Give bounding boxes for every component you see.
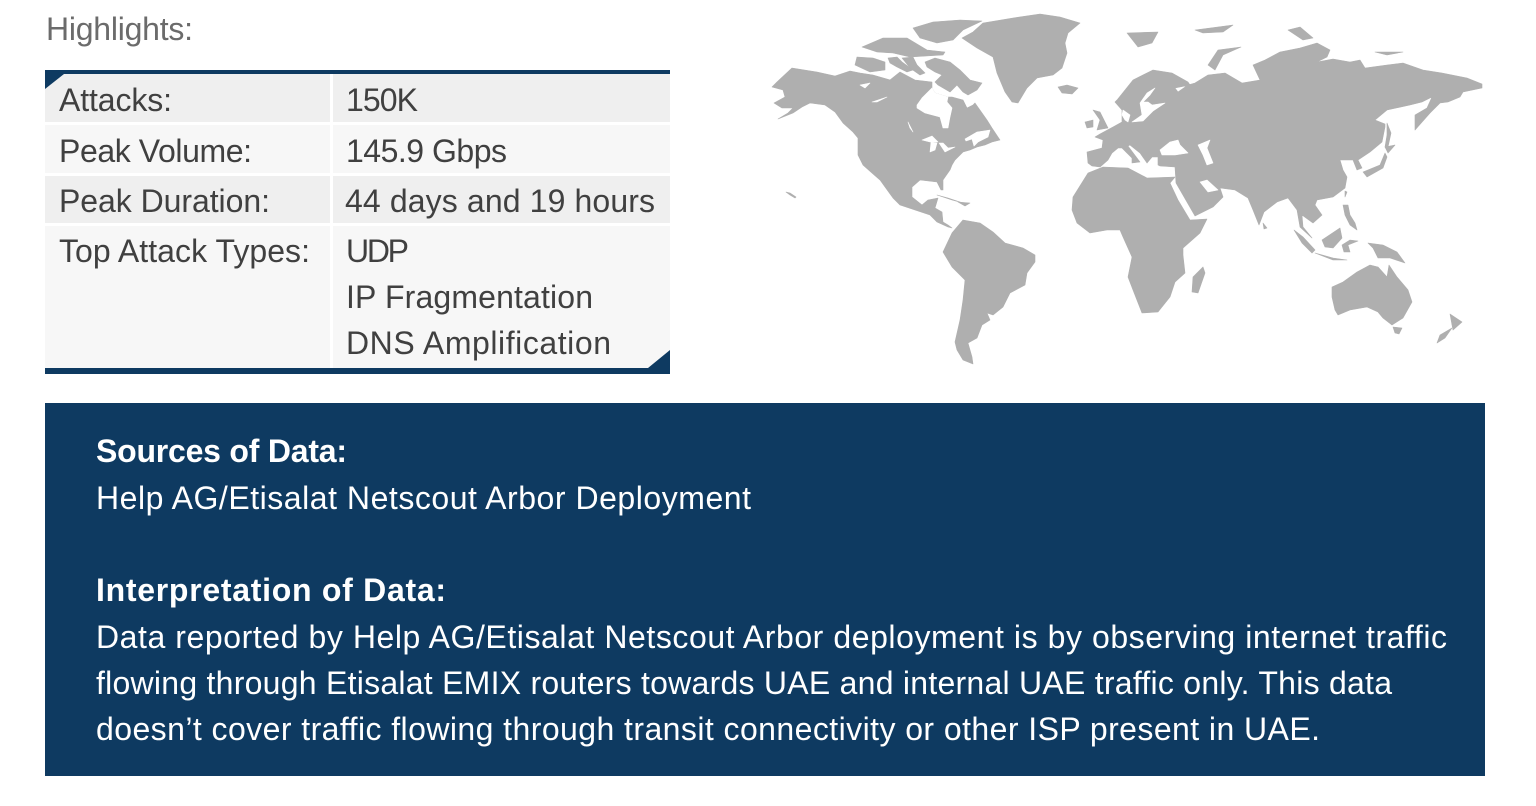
row: peak duration	[59, 183, 655, 219]
row: top attack types: IP Fragmentation	[346, 279, 593, 315]
row: attacks: 150K	[346, 82, 418, 118]
row: attacks	[59, 82, 418, 118]
world map	[772, 14, 1482, 364]
row: attacks: Attacks:	[59, 82, 172, 118]
map: North America	[772, 20, 1000, 228]
map: Africa	[1072, 167, 1207, 313]
panel: highlights table	[45, 70, 670, 374]
text: sources body: Help AG/Etisalat Netscout Arbor Deployment	[96, 480, 751, 516]
row: top attack types: Top Attack Types:	[59, 233, 310, 269]
heading: interpretation of data: Interpretation of Data:	[96, 572, 446, 608]
panel: sources and interpretation of data	[45, 403, 1485, 776]
text: interpretation body: Data reported by Help AG/Etisalat Netscout Arbor deployment is by observing internet traffic	[96, 619, 1447, 655]
heading: Highlights: Highlights:	[46, 11, 193, 47]
row: top attack types	[59, 233, 611, 361]
row: top attack types: UDP	[346, 233, 409, 269]
map: Eurasia	[1085, 43, 1482, 238]
text: interpretation body	[96, 619, 1447, 747]
row: top attack types: DNS Amplification	[346, 325, 611, 361]
row: peak duration: 44 days and 19 hours	[345, 183, 655, 219]
map: South America	[943, 220, 1035, 364]
text: interpretation body: flowing through Etisalat EMIX routers towards UAE and internal UAE traffic only. This data	[96, 665, 1392, 701]
text: interpretation body: doesn’t cover traffic flowing through transit connectivity or other ISP present in UAE.	[96, 711, 1320, 747]
map: Greenland and Iceland	[962, 14, 1080, 103]
row: peak duration: Peak Duration:	[59, 183, 270, 219]
row: peak volume	[59, 133, 507, 169]
row: peak volume: Peak Volume:	[59, 133, 252, 169]
row: peak volume: 145.9 Gbps	[346, 133, 507, 169]
heading: sources of data: Sources of Data:	[96, 433, 347, 469]
map: Asia-Pacific islands and Oceania	[1127, 25, 1462, 343]
